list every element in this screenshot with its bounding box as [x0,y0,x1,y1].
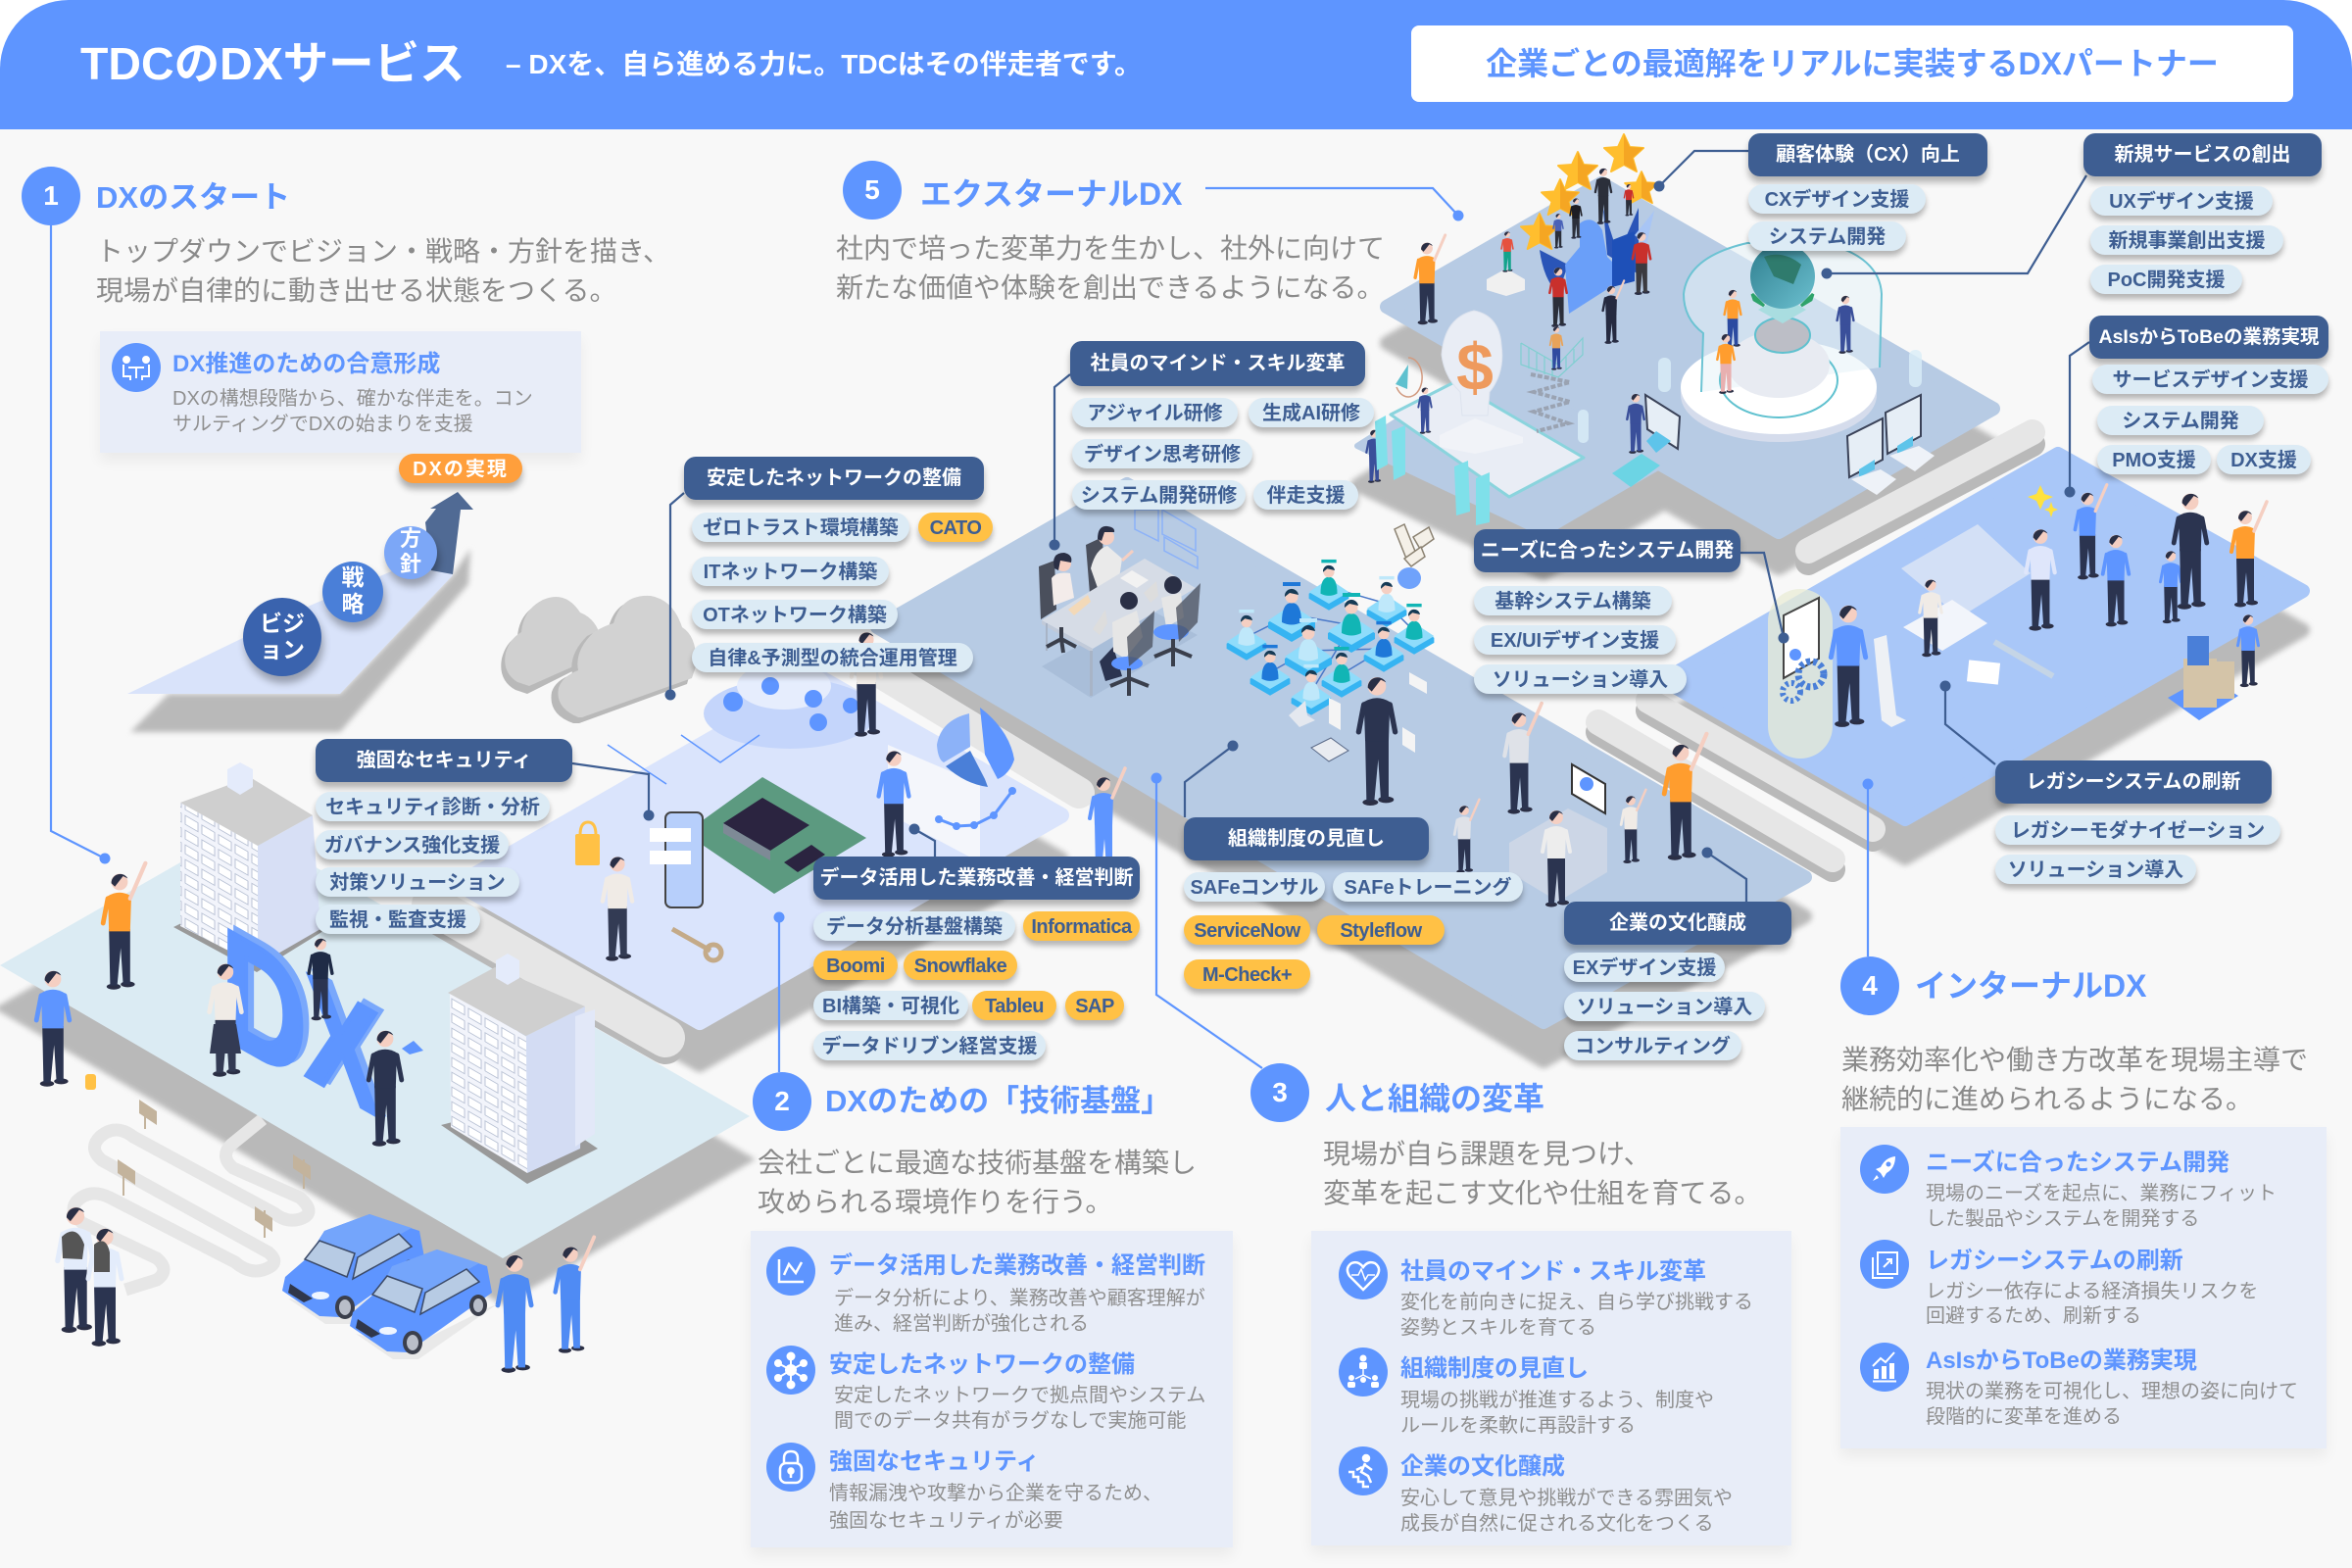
title: 企業の文化醸成 [1400,1452,1565,1480]
tag group: needs-based development [1470,529,1744,702]
tag: Boomi [826,956,885,977]
internal DX figures and objects [1768,485,2267,759]
tag: 自律&予測型の統合運用管理 [708,648,957,669]
title: 安定したネットワークの整備 [829,1350,1135,1378]
section 5 number: 5 [864,174,880,205]
item: network [766,1346,1205,1431]
tag [1072,480,1246,510]
text [834,1384,1205,1431]
item: security [766,1443,1162,1531]
tag: データドリブン経営支援 [821,1036,1037,1057]
section 5 description: 新たな価値や体験を創出できるようになる。 [836,272,1384,303]
tag: CATO [930,517,981,539]
section 4 description [1841,1045,2308,1114]
item: system development [1860,1145,2277,1229]
heading [2089,316,2328,359]
platform 3: people and organization floor [877,484,1805,1022]
tag: データ分析基盤構築 [826,916,1003,938]
panel: DX consensus [100,331,581,453]
panel: technical foundation [751,1231,1233,1547]
text: 現場の挑戦が推進するよう、制度や [1400,1390,1714,1411]
title: 強固なセキュリティ [829,1448,1040,1474]
platform 2 shadow and road [431,720,1061,1065]
heading: 新規サービスの創出 [2115,144,2291,166]
tag [1564,953,1725,982]
tag [1184,915,1310,945]
tag: OTネットワーク構築 [703,605,887,626]
building B [441,954,598,1184]
tag [1253,480,1358,510]
tag: Informatica [1031,916,1132,938]
tag: 基幹システム構築 [1494,591,1651,612]
text: 変化を前向きに捉え、自ら学び挑戦する [1400,1292,1753,1313]
tag: アジャイル研修 [1087,403,1223,424]
tag: Snowflake [914,956,1006,977]
heading: 顧客体験（CX）向上 [1776,144,1960,166]
tag [813,951,898,980]
tag group: legacy renewal [1991,760,2283,892]
big DX letters: X [306,942,378,1148]
external DX: light bulb with dollar [1366,311,1523,525]
text: 段階的に変革を進める [1926,1405,2122,1427]
tag: システム開発研修 [1081,485,1237,507]
tag: システム開発 [2122,411,2239,432]
DX realization label: DXの実現 [413,459,509,480]
tag group: mindset and skills [1066,341,1377,517]
section 2 number: 2 [774,1086,790,1116]
step: policy: 針 [400,552,421,576]
heading: ニーズに合ったシステム開発 [1481,540,1734,562]
big DX letters: D [227,890,313,1115]
icon: line chart [766,1247,815,1296]
platform 5 lower extension [1357,363,1661,534]
tag [1072,439,1252,468]
tag [1184,959,1310,989]
text: データ分析により、業務改善や顧客理解が [834,1288,1205,1309]
text: 現場のニーズを起点に、業務にフィット [1926,1182,2277,1203]
external DX: thumbs up and stars [1415,134,1658,431]
technology floor objects [575,632,1125,960]
text: 安心して意見や挑戦ができる雰囲気や [1400,1488,1733,1509]
building A [173,762,323,972]
tag: SAP [1075,996,1114,1017]
tagline box [1411,25,2293,102]
text [1400,1390,1714,1437]
section 3 heading: 人と組織の変革 [1325,1080,1544,1115]
item: AsIs to ToBe [1860,1343,2298,1427]
platform 2: technology floor [459,677,1061,1022]
platform shadows [1357,220,2303,858]
section 1 description [96,235,670,306]
roadside signs [118,1100,311,1238]
item: legacy modernisation [1860,1240,2258,1327]
icon: network [766,1346,815,1395]
tag: セキュリティ診断・分析 [325,797,540,818]
header band [0,0,2352,129]
section 4 description: 継続的に進められるようになる。 [1841,1084,2253,1114]
section 2 description [758,1147,1197,1217]
tag: 対策ソリューション [329,872,506,894]
tag group: customer experience [1744,133,1991,259]
tag: DX支援 [2230,450,2297,471]
tag [316,830,509,859]
section 1 description: 現場が自律的に動き出せる状態をつくる。 [96,275,616,306]
text: 情報漏洩や攻撃から企業を守るため、 [829,1482,1162,1503]
heading: レガシーシステムの刷新 [2027,771,2240,793]
tagline box: 企業ごとの最適解をリアルに実装するDXパートナー [1486,46,2219,81]
item: mindset [1339,1250,1753,1339]
tag group: new services [2080,133,2326,302]
tag: 生成AI研修 [1262,403,1360,424]
tag [692,600,898,629]
title: データ活用した業務改善・経営判断 [829,1252,1205,1278]
tag group: data utilization [809,857,1144,1068]
panel: internal DX [1840,1127,2327,1448]
ascent arrow [425,492,473,574]
heading [1070,341,1365,386]
tag: BI構築・可視化 [822,996,959,1017]
section 2 number [753,1072,811,1131]
consensus text: サルティングでDXの始まりを支援 [172,414,473,435]
section 1 number: 1 [43,180,59,211]
tag: システム開発 [1769,226,1886,248]
tag: PMO支援 [2112,450,2196,471]
platform 5 lower tech floor [1391,382,1584,497]
text [1926,1182,2277,1229]
heading [1474,529,1740,572]
tag [1023,911,1140,941]
section 1 number [22,167,80,225]
tag group: as-is to to-be [2085,316,2332,482]
heading [813,857,1140,900]
tag [1072,398,1238,427]
tag: Tableu [985,996,1044,1017]
tag group: corporate culture [1560,902,1795,1068]
section 4 number [1840,956,1899,1015]
icon: meeting [112,343,161,392]
heading [1995,760,2272,804]
text: 強固なセキュリティが必要 [829,1509,1063,1531]
tag group: organization review [1180,817,1526,997]
tag: ServiceNow [1194,920,1300,942]
tag [316,905,480,934]
big DX letters: X [312,939,384,1145]
winding road [74,1119,309,1290]
step: policy [384,526,437,579]
panel: people and organization [1311,1231,1791,1545]
tag: ITネットワーク構築 [704,562,877,583]
tag [316,867,519,897]
icon: org chart [1339,1348,1388,1396]
tag group: robust security [312,739,576,942]
section 2 heading: DXのための「技術基盤」 [825,1084,1171,1117]
platform 3 shadow [877,523,1805,1061]
tag [1564,1031,1741,1060]
clouds [501,596,696,723]
text: ルールを柔軟に再設計する [1400,1415,1636,1437]
tag [1564,992,1765,1021]
text [829,1482,1162,1531]
tag: EXデザイン支援 [1573,957,1716,979]
platform 5: external DX floor [1387,183,1993,532]
section 3 description: 現場が自ら課題を見つけ、 [1323,1139,1651,1168]
item: data utilization [766,1247,1205,1335]
org chart [1227,524,1434,761]
heading: 強固なセキュリティ [357,750,531,771]
external DX: globe and dome [1578,243,1935,495]
section 3 description [1323,1139,1761,1208]
tag [1748,221,1906,251]
text: 成長が自然に促される文化をつくる [1400,1513,1714,1535]
heading [1564,902,1791,945]
icon: bar chart [1860,1343,1909,1392]
title: TDCのDXサービス [80,38,466,89]
tag: M-Check+ [1202,964,1292,986]
ascent chart shadow [130,549,470,732]
item: culture [1339,1446,1733,1535]
tag [316,792,550,821]
tag [1995,855,2196,884]
tag [918,513,993,542]
platform 4: internal DX floor [1663,454,2303,819]
roads between platforms [862,662,1873,869]
tag: コンサルティング [1575,1036,1731,1057]
section 3 number [1250,1063,1309,1122]
tag: 監視・監査支援 [329,909,466,931]
tag: デザイン思考研修 [1084,444,1241,466]
section 1 description: トップダウンでビジョン・戦略・方針を描き、 [96,235,670,267]
tag [1184,872,1325,902]
tag [813,1031,1046,1060]
tag [1474,586,1672,615]
tag: サービスデザイン支援 [2113,369,2309,391]
heading: 組織制度の見直し [1228,828,1385,850]
header background [0,0,2352,129]
tag [2097,406,2264,435]
step: vision: ョン [260,637,305,662]
tag: ソリューション導入 [1493,669,1668,691]
section 3 description: 変革を起こす文化や仕組を育てる。 [1323,1178,1761,1208]
tag: 新規事業創出支援 [2109,230,2266,252]
tag: ソリューション導入 [2008,859,2183,881]
external DX: light bulb with dollar: $ [1456,330,1494,405]
heading [316,739,572,782]
step: vision: ビジ [260,611,305,636]
tag [813,911,1015,941]
text: 安定したネットワークで拠点間やシステム [834,1384,1205,1405]
tag [692,513,909,542]
heading [684,457,984,500]
tag [1317,915,1445,945]
big DX letters [221,890,384,1148]
consensus title: DX推進のための合意形成 [172,351,440,376]
DX realization label [399,454,522,483]
tag: SAFeコンサル [1190,877,1319,899]
tag [1995,815,2280,845]
tag: レガシーモダナイゼーション [2011,820,2265,842]
tag: 伴走支援 [1266,485,1345,507]
tag [2097,445,2211,474]
meeting table [1039,510,1200,698]
tag: SAFeトレーニング [1344,877,1512,899]
text: した製品やシステムを開発する [1926,1207,2199,1229]
consensus text: DXの構想段階から、確かな伴走を。コン [172,388,533,410]
tag: CXデザイン支援 [1765,189,1909,211]
tag [904,951,1017,980]
tag: EX/UIデザイン支援 [1491,630,1659,652]
step: strategy: 戦 [341,564,365,590]
text [1400,1292,1753,1339]
tag [2090,225,2283,255]
heading: 企業の文化醸成 [1609,912,1746,934]
text [1400,1488,1733,1535]
text: 間でのデータ共有がラグなしで実施可能 [834,1409,1186,1431]
icon: heart [1339,1250,1388,1299]
tag [692,643,973,672]
tag [2092,365,2328,394]
step: vision [243,598,321,676]
consensus text [172,388,533,435]
road: external to culture connector [1808,432,2033,563]
tag [1474,625,1676,655]
tag [1474,664,1687,694]
text [1926,1380,2298,1427]
section 1 heading: DXのスタート [96,180,290,214]
text: 回避するため、刷新する [1926,1305,2141,1327]
heading: 社員のマインド・スキル変革 [1090,353,1345,374]
tag: PoC開発支援 [2107,270,2225,291]
title: AsIsからToBeの業務実現 [1926,1347,2197,1374]
big DX letters: D [221,893,307,1118]
step: strategy [322,562,383,622]
tag [1065,991,1124,1020]
section 4 description: 業務効率化や働き方改革を現場主導で [1841,1045,2308,1074]
section 2 description: 攻められる環境作りを行う。 [758,1187,1112,1217]
text: 進み、経営判断が強化される [834,1313,1089,1335]
cars [282,1214,497,1359]
heading [1748,133,1987,176]
tag [972,991,1056,1020]
section 5 description: 社内で培った変革力を生かし、社外に向けて [836,233,1385,263]
heading: AsIsからToBeの業務実現 [2099,326,2319,348]
tag: UXデザイン支援 [2109,191,2254,213]
section 2 description: 会社ごとに最適な技術基盤を構築し [758,1147,1197,1178]
tag [813,991,968,1020]
title: 組織制度の見直し [1400,1354,1589,1382]
tag: ソリューション導入 [1577,997,1752,1018]
people on the start ground [36,857,632,1373]
tag [1249,398,1374,427]
step: strategy: 略 [341,591,365,616]
section 4 number: 4 [1862,970,1878,1001]
tag [2217,445,2311,474]
tag [1748,184,1926,214]
title: レガシーシステムの刷新 [1926,1247,2183,1274]
platform 1 shadow [0,869,750,1301]
icon: lock [766,1443,815,1492]
step: policy: 方 [400,526,421,551]
text [1926,1280,2258,1327]
tag: ガバナンス強化支援 [324,835,500,857]
section 5 heading: エクスターナルDX [920,176,1182,212]
text: 現状の業務を可視化し、理想の姿に向けて [1926,1380,2298,1401]
heading [2083,133,2322,176]
title: ニーズに合ったシステム開発 [1926,1149,2230,1176]
tag: Styleflow [1340,920,1422,942]
tag group: stable network [680,457,996,680]
text: レガシー依存による経済損失リスクを [1926,1280,2258,1301]
platform 1: DX start ground [0,826,750,1258]
subtitle: – DXを、自ら進める力に。TDCはその伴走者です。 [506,49,1142,79]
heading: 安定したネットワークの整備 [707,467,961,489]
tag [692,557,889,586]
section 5 number [843,161,902,220]
people in the culture area [1358,677,1706,907]
heading [1184,817,1429,860]
tag: ゼロトラスト環境構築 [703,517,899,539]
icon: runner on stairs [1339,1446,1388,1495]
tag [2090,186,2273,216]
title: 社員のマインド・スキル変革 [1400,1258,1706,1284]
icon: external document [1860,1240,1909,1289]
section 4 heading: インターナルDX [1915,968,2146,1004]
item: organization [1339,1348,1714,1437]
text [834,1288,1205,1335]
ascent chart ramp [127,555,453,694]
icon: rocket [1860,1145,1909,1194]
section 5 description [836,233,1385,303]
section 3 number: 3 [1272,1077,1288,1107]
heading: データ活用した業務改善・経営判断 [819,867,1133,889]
text: 姿勢とスキルを育てる [1400,1317,1596,1339]
tag [2090,265,2242,294]
tag [1333,872,1523,902]
